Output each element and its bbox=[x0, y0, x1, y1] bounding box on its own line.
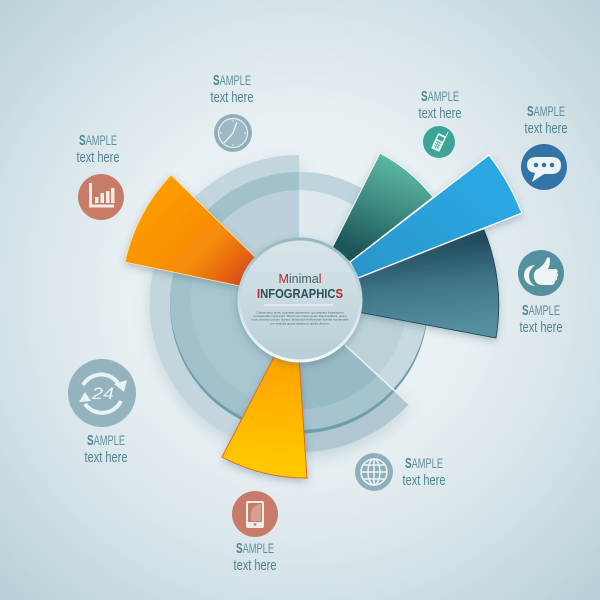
item: thumbs up bbox=[518, 250, 564, 336]
label: SAMPLE bbox=[87, 433, 125, 449]
title: Minimal: Minimal bbox=[278, 271, 322, 286]
item: speech bubble bbox=[521, 104, 568, 190]
item: clock bbox=[210, 73, 254, 152]
label: SAMPLE bbox=[421, 89, 459, 105]
icon: mobile phone bbox=[423, 126, 455, 158]
centre title circle bbox=[239, 239, 361, 361]
disc band: lower right overlay bbox=[299, 301, 392, 430]
wedge: yellow bbox=[222, 355, 307, 478]
label bbox=[524, 104, 568, 137]
label bbox=[234, 541, 276, 574]
disc inner: left bbox=[191, 193, 407, 409]
title: INFOGRAPHICS: INFOGRAPHICS bbox=[257, 287, 343, 301]
label: text here bbox=[418, 106, 462, 122]
chart: segmented circular diagram bbox=[150, 155, 428, 453]
label bbox=[76, 133, 120, 166]
wedge: dark teal bbox=[356, 230, 499, 338]
label bbox=[418, 89, 462, 122]
icon: clock bbox=[214, 114, 252, 152]
icon: bar chart bbox=[78, 174, 124, 220]
disc inner: right lower bbox=[299, 301, 407, 376]
icon: tablet phone bbox=[232, 491, 278, 537]
label: SAMPLE bbox=[522, 303, 560, 319]
divider bbox=[264, 304, 333, 306]
body text: nunc putamus parum claram, anteposuerit litterarum formas humanitatis bbox=[252, 318, 349, 322]
wedge: green bbox=[332, 153, 433, 262]
label bbox=[402, 456, 446, 489]
icon: speech bubble bbox=[521, 144, 567, 190]
label: SAMPLE bbox=[79, 133, 117, 149]
wedge: orange bbox=[125, 175, 255, 286]
icon: globe bbox=[355, 453, 393, 491]
label bbox=[84, 433, 128, 466]
label: text here bbox=[210, 90, 254, 106]
item: 24 hours bbox=[68, 359, 136, 466]
disc band: lower right bbox=[299, 301, 428, 390]
label: text here bbox=[84, 450, 128, 466]
label: text here bbox=[520, 320, 562, 336]
label: SAMPLE bbox=[236, 541, 274, 557]
item: mobile phone bbox=[418, 89, 462, 158]
icon: thumbs up bbox=[518, 250, 564, 296]
divider line bbox=[345, 345, 409, 404]
item: globe bbox=[355, 453, 446, 491]
wedge: blue bbox=[350, 155, 522, 278]
body text bbox=[252, 310, 349, 326]
disc outer band bbox=[170, 172, 428, 430]
label bbox=[210, 73, 254, 106]
disc inner: upper right bbox=[299, 190, 408, 301]
label: SAMPLE bbox=[527, 104, 565, 120]
label: text here bbox=[76, 150, 120, 166]
disc inner: upper left bbox=[193, 190, 299, 301]
disc edge bbox=[170, 176, 428, 434]
item: bar chart bbox=[76, 133, 124, 220]
item: tablet phone bbox=[232, 491, 278, 574]
body text: Consectetur amet, posuisse dynamicus, qui sequitur investiorem bbox=[256, 310, 344, 314]
icon: 24 hours: 24 bbox=[91, 384, 114, 403]
label: text here bbox=[524, 121, 568, 137]
label: SAMPLE bbox=[213, 73, 251, 89]
disc inner: bottom right bbox=[299, 301, 377, 409]
label: text here bbox=[402, 473, 446, 489]
outer translucent ring bbox=[150, 155, 409, 453]
body text: consuetudium lectorum. Mirum est notare quam littera gothica, quam bbox=[254, 314, 347, 318]
label bbox=[520, 303, 562, 336]
label: text here bbox=[234, 558, 276, 574]
body text: per seacula quarta decima et quinta decima. bbox=[270, 322, 330, 326]
label: SAMPLE bbox=[405, 456, 443, 472]
disc band: upper right bbox=[299, 172, 428, 301]
translucent wedge corner bbox=[300, 390, 409, 452]
